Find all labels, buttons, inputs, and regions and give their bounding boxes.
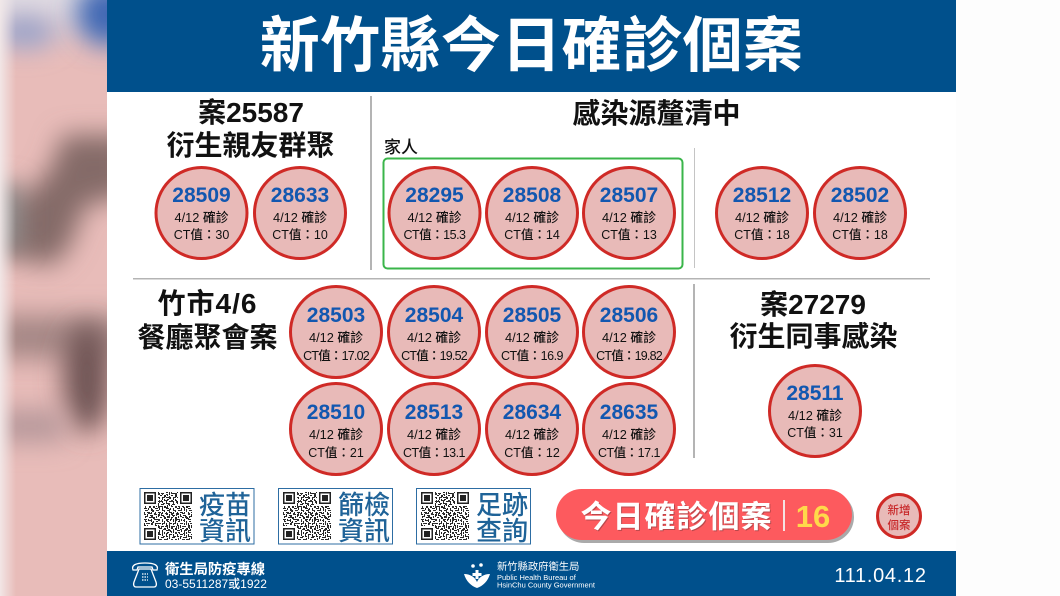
case 28635: 4/12 確診 — [602, 427, 656, 442]
case 28511: 28511 — [786, 382, 844, 405]
today's case total: 今日確診個案 — [582, 500, 774, 536]
case 28509: 4/12 確診 — [174, 210, 229, 225]
case 28505: 4/12 確診 — [505, 330, 559, 345]
case 28508 — [486, 168, 578, 258]
icon: telephone — [133, 563, 157, 587]
panel: case 27279 — [729, 289, 898, 456]
QR card: footprint lookup — [416, 488, 530, 546]
heading: restaurant gathering case: 餐廳聚會案 — [137, 322, 278, 353]
case 28507: 4/12 確診 — [602, 210, 656, 225]
case 28509: CT值：30 — [174, 227, 229, 242]
footer: HsinChu County Government — [497, 580, 596, 590]
case 28504: CT值：19.52 — [401, 348, 468, 363]
case 28512 — [716, 168, 808, 258]
case 28512: 4/12 確診 — [735, 210, 789, 225]
case 28506 — [584, 286, 674, 378]
title banner — [107, 0, 956, 92]
case 28513: 28513 — [405, 401, 463, 424]
case 28635 — [584, 384, 674, 474]
case 28507: CT值：13 — [601, 227, 657, 242]
case 28634: 4/12 確診 — [505, 427, 559, 442]
case 28513 — [388, 384, 480, 474]
case 28510 — [290, 384, 382, 474]
QR card: screening info — [278, 488, 392, 546]
today's case total: 16 — [796, 499, 830, 534]
case 28502 — [814, 168, 906, 258]
case 28633: 4/12 確診 — [273, 210, 327, 225]
blurred photo background: right — [955, 0, 1060, 596]
new cases legend: 個案 — [888, 518, 910, 532]
heading: coworker infection: 衍生同事感染 — [729, 320, 898, 352]
case 28634: 28634 — [503, 401, 562, 424]
panel: source under investigation — [384, 97, 906, 268]
case 28508: CT值：14 — [504, 227, 560, 242]
case 28634 — [486, 384, 578, 474]
footer — [107, 551, 956, 596]
case 28503: 28503 — [307, 304, 365, 327]
case 28504: 28504 — [405, 304, 464, 327]
case 28513: CT值：13.1 — [403, 445, 466, 460]
case 28502: CT值：18 — [832, 227, 888, 242]
today's case total — [556, 489, 854, 543]
heading: friends gathering: 衍生親友群聚 — [166, 130, 335, 161]
heading: source under investigation: 感染源釐清中 — [572, 97, 741, 129]
case 28502: 4/12 確診 — [833, 210, 887, 225]
panel: case 25587 — [156, 97, 346, 258]
case 28508: 28508 — [503, 184, 562, 207]
case 28506: 28506 — [600, 304, 658, 327]
case 28633: 28633 — [271, 184, 329, 207]
new cases legend: 新增 — [888, 503, 910, 517]
case 28505 — [486, 286, 578, 378]
case 28295: CT值：15.3 — [404, 227, 466, 242]
icon: health bureau logo — [464, 563, 490, 588]
bureau name: 新竹縣政府衛生局 — [497, 560, 579, 573]
case 28295: 28295 — [405, 184, 464, 207]
family group box — [384, 158, 682, 268]
case 28504: 4/12 確診 — [407, 330, 461, 345]
case 28509 — [156, 168, 247, 258]
case 28511: 4/12 確診 — [788, 408, 842, 423]
case 28507: 28507 — [600, 184, 658, 207]
panel: restaurant gathering cluster — [137, 286, 674, 474]
label: family: 家人 — [384, 137, 418, 157]
QR card: footprint lookup: 足跡 — [476, 490, 528, 520]
main panel — [107, 92, 956, 552]
case 28511 — [770, 366, 860, 456]
case 28510: 28510 — [307, 401, 365, 424]
case 28295 — [389, 168, 480, 258]
case 28510: CT值：21 — [308, 445, 364, 460]
case 28505: CT值：16.9 — [501, 348, 564, 363]
case 28295: 4/12 確診 — [407, 210, 462, 225]
case 28635: 28635 — [600, 401, 659, 424]
heading: Hsinchu City 4/6: 竹市4/6 — [158, 288, 257, 319]
case 28502: 28502 — [831, 184, 889, 207]
case 28513: 4/12 確診 — [407, 427, 461, 442]
case 28507 — [584, 168, 674, 258]
case 28635: CT值：17.1 — [598, 445, 661, 460]
bureau name English: Public Health Bureau of — [497, 573, 577, 582]
case 28510: 4/12 確診 — [309, 427, 363, 442]
heading: case 25587: 案25587 — [198, 97, 304, 128]
title: 新竹縣今日確診個案 — [260, 12, 803, 80]
case 28509: 28509 — [172, 184, 231, 207]
case 28512: CT值：18 — [734, 227, 790, 242]
blurred photo background: left — [0, 0, 160, 596]
case 28505: 28505 — [503, 304, 562, 327]
QR card: vaccine info: 疫苗 — [199, 490, 251, 520]
heading: case 27279: 案27279 — [760, 289, 866, 320]
case 28634: CT值：12 — [504, 445, 560, 460]
date: 111.04.12 — [834, 565, 927, 587]
dividers — [133, 96, 930, 458]
case 28506: CT值：19.82 — [596, 348, 663, 363]
hotline number: 03-5511287或1922 — [165, 577, 267, 591]
case 28506: 4/12 確診 — [602, 330, 656, 345]
new cases legend — [878, 494, 920, 538]
case 28633 — [254, 168, 346, 258]
QR card: screening info: 資訊 — [338, 516, 390, 546]
case 28503 — [290, 286, 382, 378]
today's case total: 今日確診個案 — [580, 500, 772, 534]
QR card: screening info: 篩檢 — [338, 490, 390, 520]
QR card: vaccine info: 資訊 — [199, 516, 251, 546]
case 28504 — [388, 286, 480, 378]
case 28503: CT值：17.02 — [303, 348, 370, 363]
case 28503: 4/12 確診 — [309, 330, 363, 345]
case 28633: CT值：10 — [272, 227, 328, 242]
case 28511: CT值：31 — [787, 425, 843, 440]
QR card: vaccine info — [140, 488, 254, 546]
hotline label: 衛生局防疫專線 — [165, 560, 265, 578]
QR card: footprint lookup: 查詢 — [476, 516, 528, 546]
case 28508: 4/12 確診 — [505, 210, 559, 225]
case 28512: 28512 — [733, 184, 791, 207]
